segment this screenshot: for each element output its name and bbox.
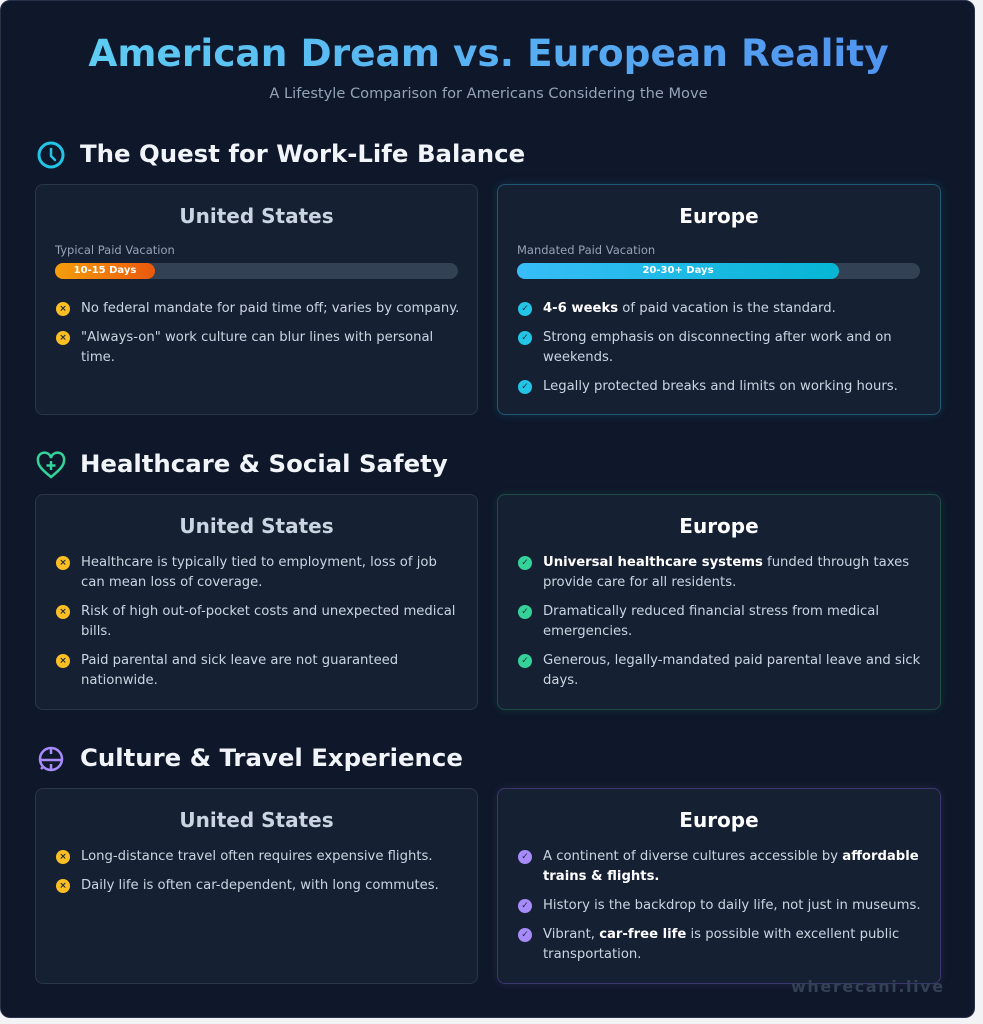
title: American Dream vs. European Reality	[88, 31, 889, 75]
panel: US healthcare	[35, 494, 478, 710]
panel: US healthcare: Paid parental and sick leave are not guaranteed nationwide.	[81, 653, 398, 688]
bar: US vacation: 10-15 Days	[74, 265, 136, 276]
panel: US culture: United States	[179, 808, 334, 832]
panel: Europe work-life: ✓	[521, 333, 529, 343]
panel: Europe healthcare: Generous, legally-mandated paid parental leave and sick days.	[543, 653, 920, 688]
bar: US vacation	[55, 263, 458, 279]
panel: Europe culture	[497, 788, 941, 984]
panel: Europe culture: ✓	[521, 901, 529, 911]
panel: Europe work-life	[497, 184, 941, 415]
panel: US work-life: ×	[59, 304, 67, 314]
panel: US culture: ×	[59, 881, 67, 891]
panel: Europe work-life: Europe	[679, 204, 759, 228]
icon: globe	[38, 746, 64, 772]
panel: Europe culture: A continent of diverse cultures accessible by affordable trains & flights.	[543, 849, 919, 884]
panel: US work-life: No federal mandate for paid time off; varies by company.	[81, 301, 459, 316]
panel: Europe culture: History is the backdrop to daily life, not just in museums.	[543, 898, 921, 913]
panel: Europe culture: Europe	[679, 808, 759, 832]
panel: US healthcare: Risk of high out-of-pocket costs and unexpected medical bills.	[81, 604, 455, 639]
panel: US work-life: ×	[59, 333, 67, 343]
panel: Europe work-life: 4-6 weeks of paid vacation is the standard.	[543, 301, 836, 316]
panel: US work-life	[35, 184, 478, 415]
panel: US healthcare: United States	[179, 514, 334, 538]
panel: US healthcare: ×	[59, 558, 67, 568]
panel: Europe work-life: Strong emphasis on disconnecting after work and on weekends.	[543, 330, 892, 365]
heading: healthcare: Healthcare & Social Safety	[80, 449, 448, 478]
watermark: wherecani.live	[791, 977, 945, 996]
icon: clock	[38, 142, 64, 168]
panel: Europe healthcare: ✓	[521, 558, 529, 568]
panel: Europe healthcare: ✓	[521, 607, 529, 617]
panel: US healthcare: ×	[59, 607, 67, 617]
panel: Europe culture: ✓	[521, 930, 529, 940]
panel: Europe healthcare: Dramatically reduced financial stress from medical emergencies.	[543, 604, 879, 639]
panel: Europe healthcare: Europe	[679, 514, 759, 538]
panel: US work-life: United States	[179, 204, 334, 228]
panel: Europe culture: ✓	[521, 852, 529, 862]
icon: heart	[36, 451, 66, 478]
panel: US culture	[35, 788, 478, 984]
panel: US work-life: Typical Paid Vacation	[55, 243, 175, 257]
panel: US healthcare: Healthcare is typically tied to employment, loss of job can mean loss of coverage.	[81, 555, 437, 590]
panel: Europe healthcare: Universal healthcare systems funded through taxes provide care for all residents.	[543, 555, 909, 590]
bar: Europe vacation: 20-30+ Days	[642, 265, 714, 276]
panel: US culture: Daily life is often car-dependent, with long commutes.	[81, 878, 439, 893]
bar: Europe vacation	[517, 263, 920, 279]
subtitle: A Lifestyle Comparison for Americans Considering the Move	[269, 85, 708, 102]
panel: Europe work-life: ✓	[521, 382, 529, 392]
panel: US work-life: "Always-on" work culture can blur lines with personal time.	[81, 330, 433, 365]
panel: Europe culture: Vibrant, car-free life is possible with excellent public transportation.	[543, 927, 899, 962]
panel: Europe work-life: Mandated Paid Vacation	[517, 243, 655, 257]
heading: work-life: The Quest for Work-Life Balance	[80, 139, 525, 168]
panel: Europe healthcare: ✓	[521, 656, 529, 666]
heading: culture: Culture & Travel Experience	[80, 743, 463, 772]
panel: Europe work-life: Legally protected breaks and limits on working hours.	[543, 379, 898, 394]
panel: Europe work-life: ✓	[521, 304, 529, 314]
panel: Europe healthcare	[497, 494, 941, 710]
panel: US culture: Long-distance travel often requires expensive flights.	[81, 849, 433, 864]
panel: US culture: ×	[59, 852, 67, 862]
panel: US healthcare: ×	[59, 656, 67, 666]
